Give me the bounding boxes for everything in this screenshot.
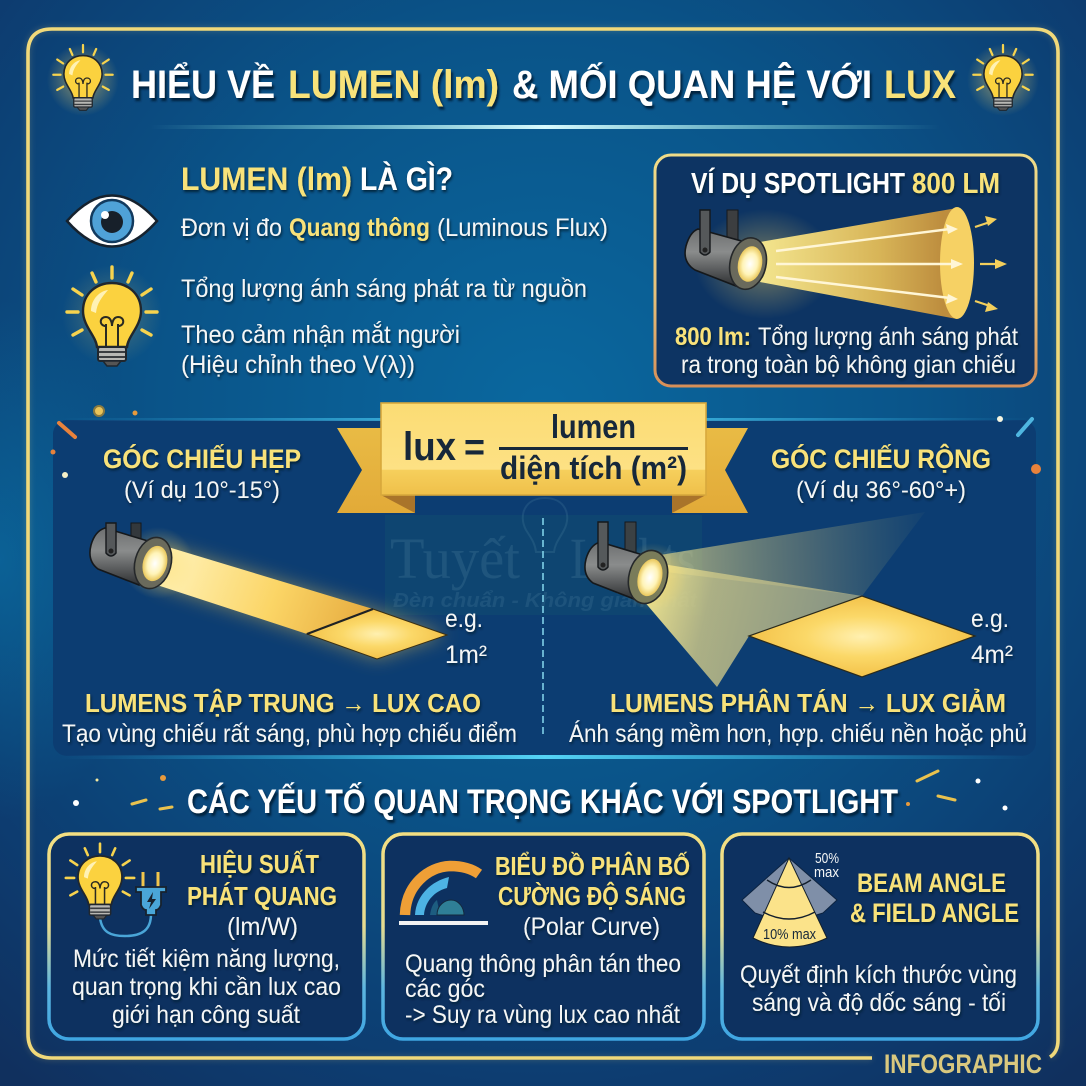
card title <box>850 868 1019 928</box>
heading: narrow: GÓC CHIẾU HẸP <box>103 443 301 474</box>
wide example: (Ví dụ 36°-60°+) <box>796 477 966 504</box>
ribbon: lux formula <box>337 403 748 513</box>
spotlight caption: Tổng lượng ánh sáng phát <box>758 323 1018 351</box>
icon: title bulb right <box>967 44 1039 116</box>
heading: lumen: LUMEN (lm) <box>181 161 352 197</box>
wide beam side <box>569 443 1027 748</box>
icon: beam angle diagram <box>742 850 839 947</box>
wide description: Ánh sáng mềm hơn, hợp. chiếu nền hoặc phủ <box>569 719 1027 748</box>
corner tag: INFOGRAPHIC <box>884 1049 1042 1079</box>
card subtitle: (Polar Curve) <box>523 913 660 941</box>
wide conclusion: LUMENS PHÂN TÁN → LUX GIẢM <box>610 688 1006 718</box>
formula text: lumen <box>551 408 636 445</box>
wide beam illustration <box>643 512 975 687</box>
card: luminous efficacy <box>49 834 364 1039</box>
card title: CƯỜNG ĐỘ SÁNG <box>498 881 686 911</box>
card title <box>495 851 690 911</box>
card body <box>405 950 681 1029</box>
panel: spotlight 800 lm <box>655 155 1036 386</box>
card title: BIỂU ĐỒ PHÂN BỐ <box>495 851 690 881</box>
background side glow <box>0 300 150 820</box>
card body: sáng và độ dốc sáng - tối <box>752 989 1006 1017</box>
watermark: Đèn chuẩn - Không gian chất <box>393 590 698 612</box>
area label narrow: e.g. <box>445 605 483 633</box>
heading: spotlight example: VÍ DỤ SPOTLIGHT <box>691 166 905 200</box>
card body: các góc <box>405 975 485 1003</box>
spotlight caption: ra trong toàn bộ không gian chiếu <box>681 351 1016 379</box>
angle labels: 10% max <box>763 926 816 943</box>
area label wide <box>971 605 1013 669</box>
angle labels: max <box>814 864 839 881</box>
area label wide: 4m² <box>971 641 1013 669</box>
formula text: lux <box>403 425 456 469</box>
area label narrow: 1m² <box>445 641 487 669</box>
title: LUX <box>884 63 956 107</box>
narrow conclusion: LUMENS TẬP TRUNG → LUX CAO <box>85 688 481 718</box>
card body: -> Suy ra vùng lux cao nhất <box>405 1001 680 1029</box>
card body: giới hạn công suất <box>112 1001 300 1029</box>
card body: Quang thông phân tán theo <box>405 950 681 978</box>
narrow beam side <box>62 443 517 748</box>
card title: HIỆU SUẤT <box>200 849 319 879</box>
definition line: Quang thông <box>289 214 430 242</box>
icon: light bulb <box>62 265 162 366</box>
spotlight caption <box>675 323 1018 379</box>
heading: other factors: CÁC YẾU TỐ QUAN TRỌNG KHÁC VỚI SPOTLIGHT <box>187 782 898 821</box>
definition line <box>181 214 608 242</box>
title: HIỂU VỀ <box>131 60 275 107</box>
card title <box>187 849 337 911</box>
watermark: Tuyết <box>390 526 520 591</box>
icon: polar curve <box>399 866 488 925</box>
description lines <box>181 275 587 379</box>
panel: what is lumen <box>62 161 608 379</box>
card body <box>740 961 1017 1017</box>
watermark <box>385 498 702 615</box>
heading: wide: GÓC CHIẾU RỘNG <box>771 443 991 474</box>
formula text <box>403 408 688 486</box>
description lines: (Hiệu chỉnh theo V(λ)) <box>181 351 415 379</box>
title: & MỐI QUAN HỆ VỚI <box>512 61 872 107</box>
angle labels <box>763 850 839 943</box>
divider dashed <box>542 518 544 738</box>
watermark: Lights <box>570 526 696 591</box>
heading: spotlight example: 800 LM <box>912 168 1000 200</box>
angle labels: 50% <box>815 850 839 867</box>
formula text: = <box>464 427 485 469</box>
card body: Mức tiết kiệm năng lượng, <box>73 945 340 973</box>
narrow description: Tạo vùng chiếu rất sáng, phù hợp chiếu điểm <box>62 720 517 748</box>
icon: eye <box>67 196 157 246</box>
output arrows <box>975 216 1007 312</box>
card title: & FIELD ANGLE <box>850 898 1019 928</box>
title: LUMEN (lm) <box>288 63 499 107</box>
title divider glow <box>150 125 940 129</box>
card subtitle: (lm/W) <box>227 913 298 941</box>
icon: narrow lamp <box>90 523 194 599</box>
narrow beam illustration <box>157 547 447 659</box>
definition line: Đơn vị đo <box>181 214 282 242</box>
card body: quan trọng khi cần lux cao <box>72 973 341 1001</box>
description lines: Tổng lượng ánh sáng phát ra từ nguồn <box>181 275 587 303</box>
card: polar curve <box>383 834 704 1039</box>
card title: BEAM ANGLE <box>857 868 1006 898</box>
title <box>131 60 956 107</box>
area label wide: e.g. <box>971 605 1009 633</box>
card: beam and field angle <box>722 834 1038 1039</box>
area label narrow <box>445 605 487 669</box>
icon: spotlight lamp <box>685 210 771 293</box>
spotlight caption: 800 lm: <box>675 323 751 351</box>
formula text: diện tích (m²) <box>500 450 687 486</box>
decorative sparkles <box>50 406 1041 810</box>
narrow example: (Ví dụ 10°-15°) <box>124 477 280 504</box>
heading: lumen: LÀ GÌ? <box>360 161 453 197</box>
icon: wide lamp <box>585 522 687 611</box>
card body <box>72 945 341 1029</box>
card body: Quyết định kích thước vùng <box>740 961 1017 989</box>
spotlight beam <box>695 207 974 319</box>
description lines: Theo cảm nhận mắt người <box>181 320 460 349</box>
panel: beam comparison <box>53 418 1036 759</box>
panel glow lines <box>60 418 1030 759</box>
card title: PHÁT QUANG <box>187 881 337 911</box>
icon: title bulb left <box>47 44 119 116</box>
definition line: (Luminous Flux) <box>437 214 608 242</box>
heading: lumen <box>181 161 453 197</box>
icon: bulb and plug <box>66 844 166 936</box>
